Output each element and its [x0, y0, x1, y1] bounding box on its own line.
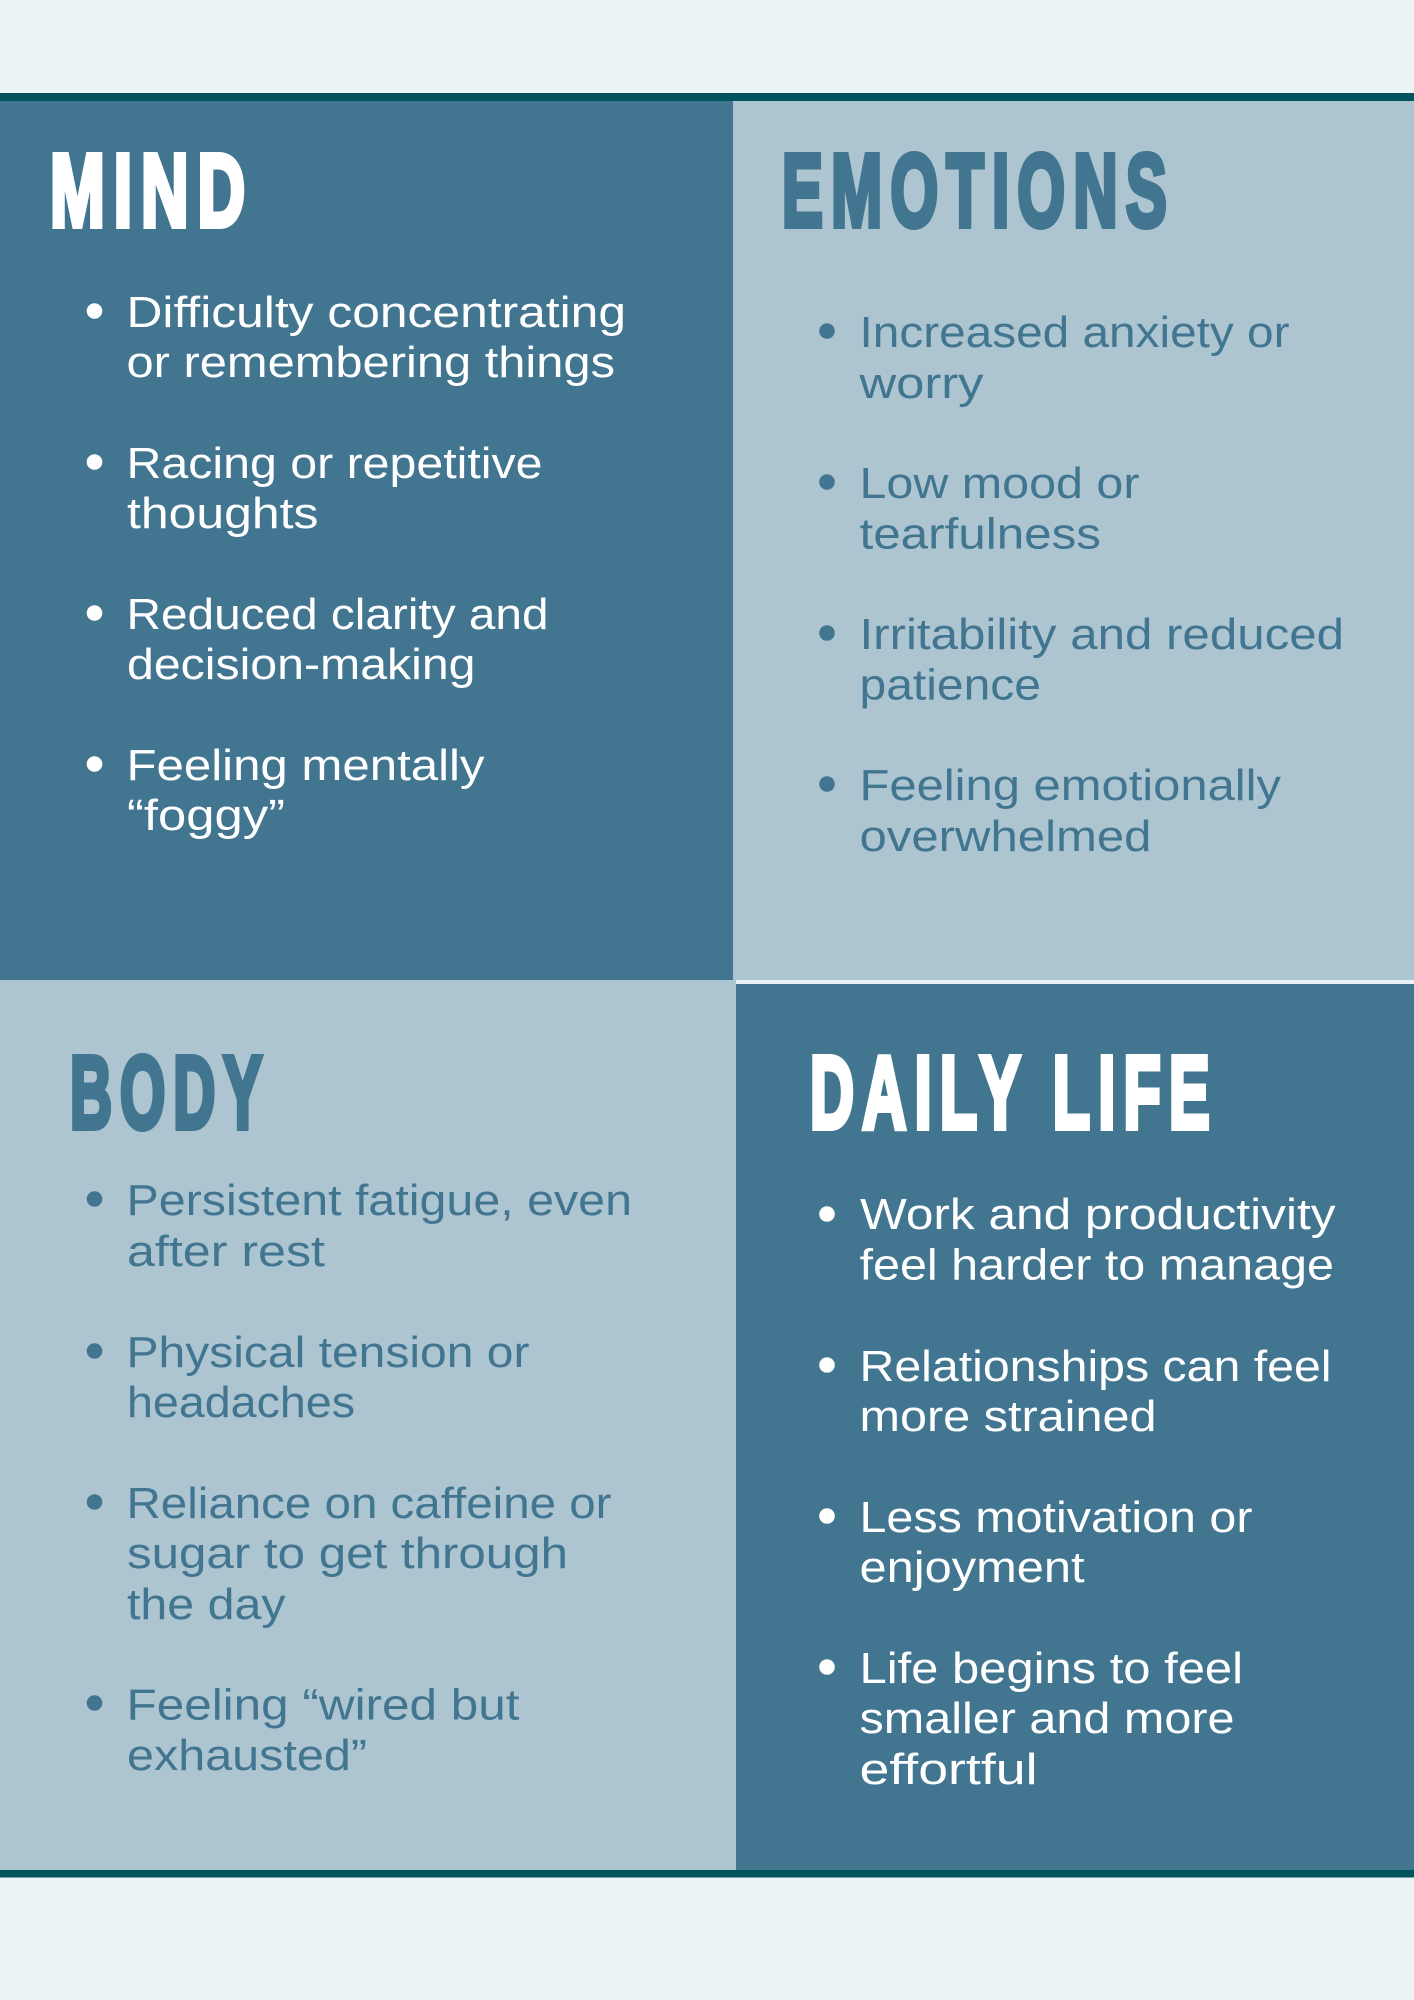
- list: emotions symptoms: Increased anxiety or: [860, 308, 1290, 357]
- heading: mind: MIND: [50, 133, 254, 248]
- list: body symptoms: exhausted”: [127, 1731, 367, 1780]
- heading: body: BODY: [70, 1035, 270, 1150]
- list: body symptoms: headaches: [127, 1378, 355, 1427]
- list: body symptoms: Physical tension or: [126, 1328, 530, 1377]
- list: mind symptoms: Feeling mentally: [126, 741, 484, 790]
- list: daily life effects: Work and productivity: [860, 1190, 1336, 1239]
- list: mind symptoms: thoughts: [127, 489, 318, 538]
- list: mind symptoms: Difficulty concentrating: [126, 288, 626, 337]
- list: daily life effects: smaller and more: [860, 1694, 1234, 1743]
- list: daily life effects: enjoyment: [860, 1543, 1084, 1592]
- list: emotions symptoms: Irritability and reduced: [860, 610, 1344, 659]
- list: body symptoms: Reliance on caffeine or: [126, 1479, 612, 1528]
- list: body symptoms: after rest: [127, 1227, 325, 1276]
- list: body symptoms: Feeling “wired but: [126, 1680, 520, 1730]
- list: mind symptoms: [87, 288, 626, 840]
- panel: mind: [0, 100, 733, 980]
- panel: daily life: [736, 980, 1414, 1870]
- list: daily life effects: effortful: [860, 1745, 1038, 1794]
- list: mind symptoms: decision-making: [127, 640, 476, 689]
- list: emotions symptoms: [819, 308, 1344, 861]
- list: daily life effects: more strained: [860, 1392, 1156, 1441]
- list: emotions symptoms: overwhelmed: [860, 812, 1152, 861]
- list: daily life effects: Relationships can feel: [860, 1342, 1332, 1391]
- list: body symptoms: Persistent fatigue, even: [126, 1176, 632, 1225]
- list: daily life effects: Life begins to feel: [860, 1644, 1243, 1693]
- list: mind symptoms: or remembering things: [126, 338, 615, 387]
- list: daily life effects: feel harder to manage: [860, 1240, 1334, 1290]
- panel: body: [0, 980, 736, 1870]
- list: emotions symptoms: worry: [858, 359, 984, 408]
- list: body symptoms: [87, 1176, 632, 1780]
- list: emotions symptoms: Low mood or: [860, 459, 1140, 508]
- list: emotions symptoms: patience: [860, 660, 1041, 710]
- panel: emotions: [733, 100, 1414, 980]
- list: daily life effects: [819, 1190, 1336, 1794]
- list: body symptoms: sugar to get through: [127, 1529, 568, 1578]
- list: mind symptoms: “foggy”: [127, 791, 285, 840]
- list: emotions symptoms: tearfulness: [860, 510, 1101, 558]
- list: daily life effects: Less motivation or: [860, 1493, 1252, 1542]
- list: body symptoms: the day: [127, 1580, 286, 1629]
- list: mind symptoms: Racing or repetitive: [126, 439, 542, 488]
- list: mind symptoms: Reduced clarity and: [126, 590, 548, 639]
- list: emotions symptoms: Feeling emotionally: [860, 761, 1281, 810]
